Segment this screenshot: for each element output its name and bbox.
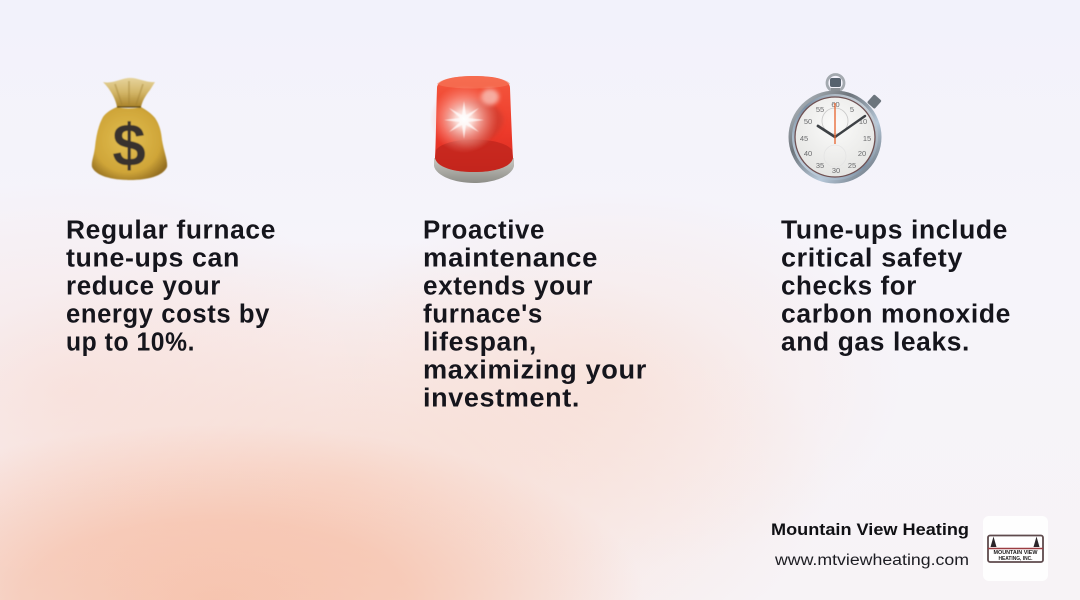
text block: energy costs: Regular furnace bbox=[66, 216, 276, 244]
stopwatch dial numbers: 40 bbox=[804, 149, 812, 158]
footer company name: Mountain View Heating bbox=[771, 521, 969, 539]
stopwatch dial numbers: 10 bbox=[859, 117, 867, 126]
stopwatch dial numbers: 30 bbox=[832, 166, 840, 175]
icon: money bag bbox=[92, 78, 167, 180]
text block: furnace lifespan: Proactive bbox=[423, 216, 545, 244]
icon: stopwatch bbox=[788, 74, 882, 184]
stopwatch dial numbers: 35 bbox=[816, 161, 824, 170]
text block: furnace lifespan: maximizing your bbox=[423, 356, 647, 384]
text block: furnace lifespan: investment. bbox=[423, 384, 580, 412]
text block: furnace lifespan bbox=[423, 216, 647, 412]
text block: energy costs: up to 10%. bbox=[66, 328, 195, 356]
text block: energy costs bbox=[66, 216, 276, 356]
footer website: www.mtviewheating.com bbox=[774, 552, 969, 569]
icon glyph: dollar sign: $ bbox=[112, 112, 146, 179]
text block: furnace lifespan: maintenance bbox=[423, 244, 598, 272]
text block: safety checks: and gas leaks. bbox=[781, 328, 970, 356]
text block: safety checks: Tune-ups include bbox=[781, 216, 1008, 244]
icon: red siren light bbox=[430, 76, 514, 183]
text block: furnace lifespan: lifespan, bbox=[423, 328, 537, 356]
stopwatch dial numbers: 60 bbox=[831, 100, 840, 109]
stopwatch dial numbers: 20 bbox=[858, 149, 866, 158]
stopwatch dial numbers: 25 bbox=[848, 161, 856, 170]
text block: safety checks: carbon monoxide bbox=[781, 300, 1011, 328]
text block: safety checks: critical safety bbox=[781, 244, 963, 272]
text block: energy costs: reduce your bbox=[66, 272, 221, 300]
stopwatch dial numbers: 50 bbox=[804, 117, 812, 126]
stopwatch dial numbers: 15 bbox=[863, 134, 871, 143]
logo: Mountain View Heating badge bbox=[983, 516, 1048, 581]
stopwatch dial numbers: 5 bbox=[850, 105, 854, 114]
stopwatch dial numbers: 55 bbox=[816, 105, 824, 114]
text block: energy costs: energy costs by bbox=[66, 300, 270, 328]
stopwatch dial numbers: 45 bbox=[800, 134, 808, 143]
stopwatch dial numbers bbox=[800, 100, 871, 175]
text block: safety checks bbox=[781, 216, 1011, 356]
text block: energy costs: tune-ups can bbox=[66, 244, 240, 272]
logo: Mountain View Heating badge: HEATING, INC. bbox=[998, 556, 1033, 562]
text block: furnace lifespan: extends your bbox=[423, 272, 593, 300]
text block: furnace lifespan: furnace's bbox=[423, 300, 543, 328]
logo: Mountain View Heating badge: MOUNTAIN VIEW bbox=[994, 550, 1038, 556]
text block: safety checks: checks for bbox=[781, 272, 917, 300]
